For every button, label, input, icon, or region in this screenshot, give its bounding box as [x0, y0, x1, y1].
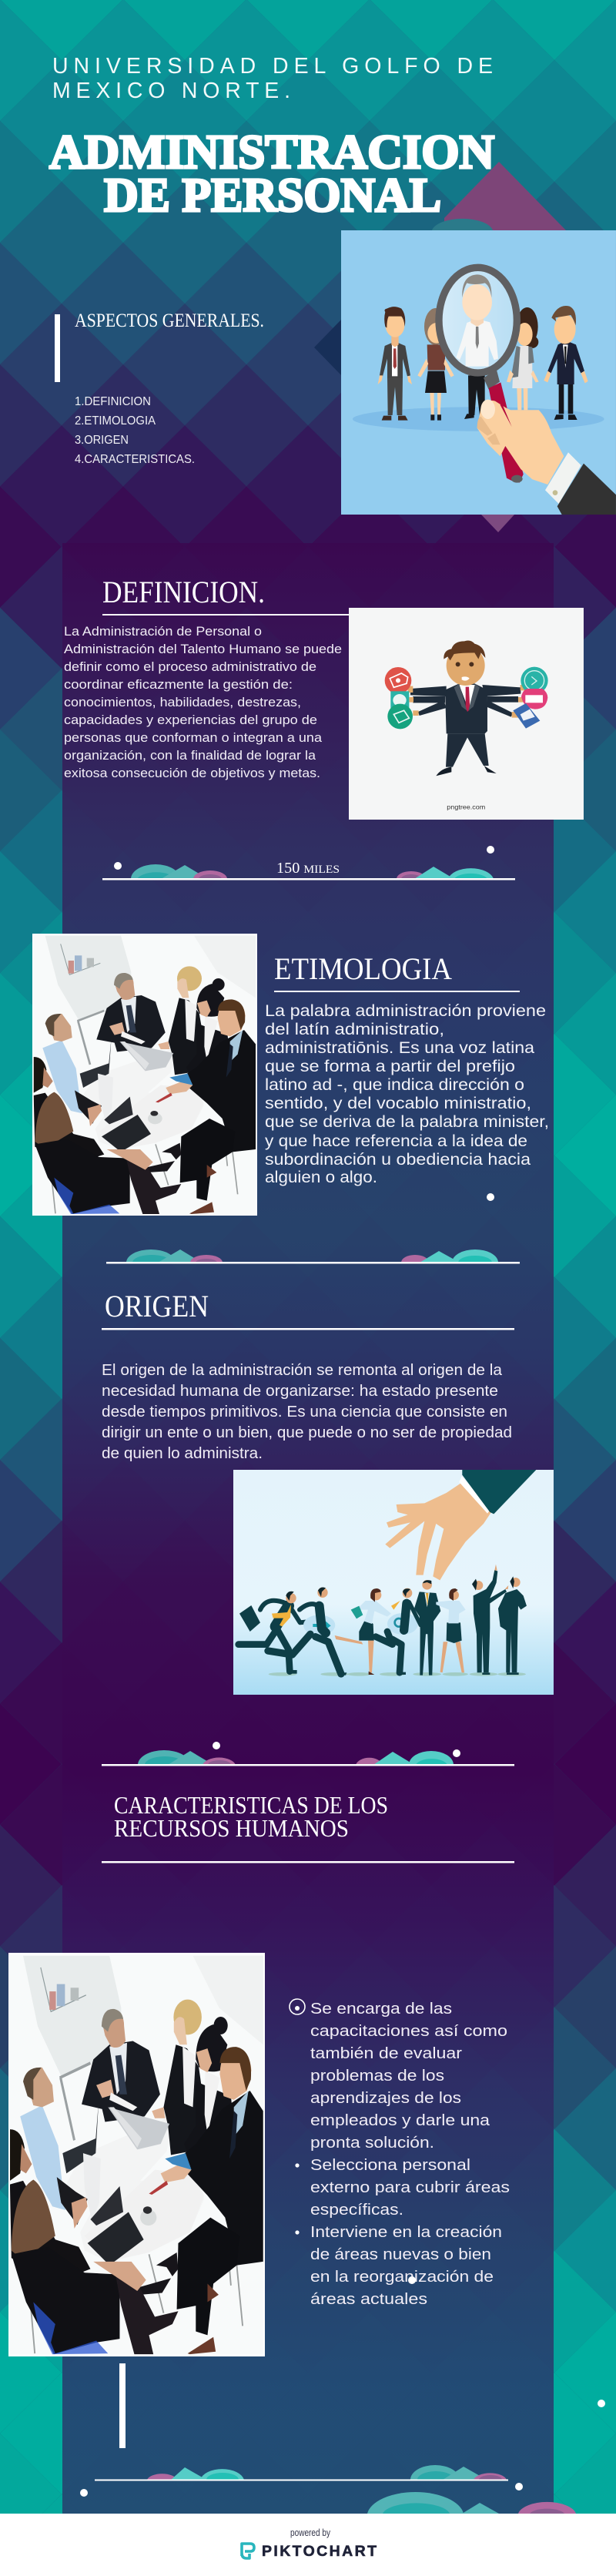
divider 2 [106, 1249, 520, 1263]
figure: woman in skirt [417, 308, 454, 421]
list: caracteristicas bullets: en la reorganización de [310, 2269, 494, 2286]
illustration: multitasking manager [349, 608, 584, 820]
text: etimologia paragraph [265, 1002, 549, 1186]
list: contents: 3.ORIGEN [75, 434, 129, 447]
figure: candidate legs [468, 375, 485, 415]
heading: origen: ORIGEN [105, 1289, 209, 1323]
decorative shapes behind hero image [314, 162, 566, 532]
figure: magnified candidate [456, 274, 498, 367]
text: piktochart wordmark: PIKTOCHART [262, 2543, 377, 2560]
list: caracteristicas bullets: áreas actuales [310, 2291, 427, 2308]
icon: magnifier handle [484, 369, 500, 390]
heading: definicion: DEFINICION. [102, 575, 265, 609]
figure: running woman [335, 1588, 391, 1675]
footer: piktochart [0, 2514, 616, 2576]
subtitle: university [52, 54, 493, 103]
heading: caracteristicas: RECURSOS HUMANOS [114, 1814, 349, 1842]
text: origen paragraph: necesidad humana de organizarse: ha estado presente [102, 1383, 498, 1400]
list: caracteristicas bullets: problemas de los [310, 2068, 444, 2085]
figure: standing man in centre [414, 1580, 440, 1675]
vertical accent bar [119, 2363, 126, 2448]
figure: woman in grey jacket [507, 307, 539, 410]
text: definicion paragraph: conocimientos, habilidades, destrezas, [64, 695, 301, 709]
text: definicion paragraph: exitosa consecución de objetivos y metas. [64, 766, 320, 780]
text: etimologia paragraph: que se deriva de la palabra minister, [265, 1113, 549, 1131]
figure: man with gears cloud [376, 1588, 420, 1675]
heading: caracteristicas: CARACTERISTICAS DE LOS [114, 1791, 388, 1819]
divider 4 with bottom shapes [80, 2400, 605, 2514]
label: 150 miles: 150 MILES [276, 860, 340, 877]
divider 3 [102, 1742, 514, 1766]
text: definicion paragraph: La Administración de Personal o [64, 624, 262, 639]
subtitle: university: MEXICO NORTE. [52, 79, 290, 103]
text: etimologia paragraph: del latín administratio, [265, 1021, 444, 1038]
figure: running man with briefcase [239, 1601, 313, 1672]
list: contents: 2.ETIMOLOGIA [75, 414, 156, 428]
figure: man in navy suit [544, 306, 588, 420]
icon: circled bullet [290, 1999, 305, 2014]
text: etimologia paragraph: subordinación u obediencia hacia [265, 1151, 531, 1169]
icon: giant hand [385, 1470, 536, 1580]
icon: hand [477, 401, 564, 485]
figure: man in grey suit [378, 307, 412, 421]
text: powered by: powered by [290, 2527, 331, 2538]
list: contents: 1.DEFINICION [75, 395, 151, 408]
list: caracteristicas bullets: Se encarga de las [310, 2001, 452, 2018]
text: definicion paragraph [64, 624, 342, 780]
list: contents [75, 395, 195, 466]
text: definicion paragraph: Administración del Talento Humano se puede [64, 642, 342, 656]
text: origen paragraph: de quien lo administra. [102, 1445, 263, 1462]
list: caracteristicas bullets: externo para cubrir áreas [310, 2179, 510, 2196]
text: etimologia paragraph: sentido, y del vocablo ministratio, [265, 1095, 531, 1112]
divider 1 [102, 846, 515, 880]
text: etimologia paragraph: que se forma a partir del prefijo [265, 1058, 515, 1075]
text: image watermark: pngtree.com [447, 803, 486, 810]
text: origen paragraph: dirigir un ente o un bien, que puede o no ser de propiedad [102, 1424, 512, 1441]
list: caracteristicas bullets: capacitaciones así como [310, 2023, 507, 2040]
title: ADMINISTRACION [49, 126, 494, 179]
text: etimologia paragraph: La palabra administración proviene [265, 1002, 546, 1020]
list: caracteristicas bullets: empleados y darle una [310, 2112, 490, 2129]
list: caracteristicas bullets [290, 1999, 510, 2308]
subtitle: university: UNIVERSIDAD DEL GOLFO DE [52, 54, 493, 79]
heading: aspectos generales: ASPECTOS GENERALES. [75, 310, 264, 331]
list: caracteristicas bullets: Interviene en la creación [310, 2224, 502, 2241]
figure: man pointing up [472, 1565, 508, 1675]
text: definicion paragraph: definir como el proceso administrativo de [64, 659, 316, 674]
figure: woman looking up [436, 1588, 466, 1672]
list: caracteristicas bullets: también de evaluar [310, 2045, 462, 2062]
icon: magnifying glass lens [439, 267, 517, 373]
text: definicion paragraph: personas que conforman o integran a una [64, 730, 323, 745]
text: etimologia paragraph: latino ad -, que indica dirección o [265, 1076, 524, 1094]
heading: etimologia: ETIMOLOGIA [274, 951, 452, 986]
photo: business meeting large [8, 1953, 265, 2356]
heading: caracteristicas [114, 1791, 388, 1842]
vertical accent bar [55, 314, 60, 382]
illustration: hand picking from running employees [233, 1470, 554, 1695]
list: contents: 4.CARACTERISTICAS. [75, 453, 195, 466]
icon: piktochart logo [242, 2544, 254, 2558]
text: etimologia paragraph: alguien o algo. [265, 1169, 377, 1186]
text: definicion paragraph: organización, con la finalidad de lograr la [64, 748, 316, 763]
list: caracteristicas bullets: Selecciona personal [310, 2157, 470, 2174]
figure: man looking up [498, 1576, 527, 1675]
figure: running man with cloud [268, 1587, 346, 1675]
text: definicion paragraph: coordinar eficazmente la gestión de: [64, 677, 293, 692]
panel: central dark column [62, 543, 554, 2514]
title: DE PERSONAL [104, 169, 441, 222]
text: definicion paragraph: capacidades y experiencias del grupo de [64, 713, 317, 727]
text: origen paragraph [102, 1362, 512, 1462]
text: origen paragraph: desde tiempos primitivos. Es una ciencia que consiste en [102, 1404, 507, 1420]
text: origen paragraph: El origen de la administración se remonta al origen de la [102, 1362, 503, 1379]
illustration: magnifying glass over candidates [341, 230, 616, 515]
list: caracteristicas bullets: pronta solución. [310, 2135, 434, 2152]
list: caracteristicas bullets: de áreas nuevas o bien [310, 2246, 491, 2263]
list: caracteristicas bullets: específicas. [310, 2202, 403, 2219]
text: etimologia paragraph: administratiōnis. Es una voz latina [265, 1039, 534, 1057]
photo: business meeting [32, 934, 257, 1216]
text: etimologia paragraph: y que hace referencia a la idea de [265, 1132, 527, 1150]
list: caracteristicas bullets: aprendizajes de los [310, 2090, 461, 2107]
title [49, 126, 494, 222]
